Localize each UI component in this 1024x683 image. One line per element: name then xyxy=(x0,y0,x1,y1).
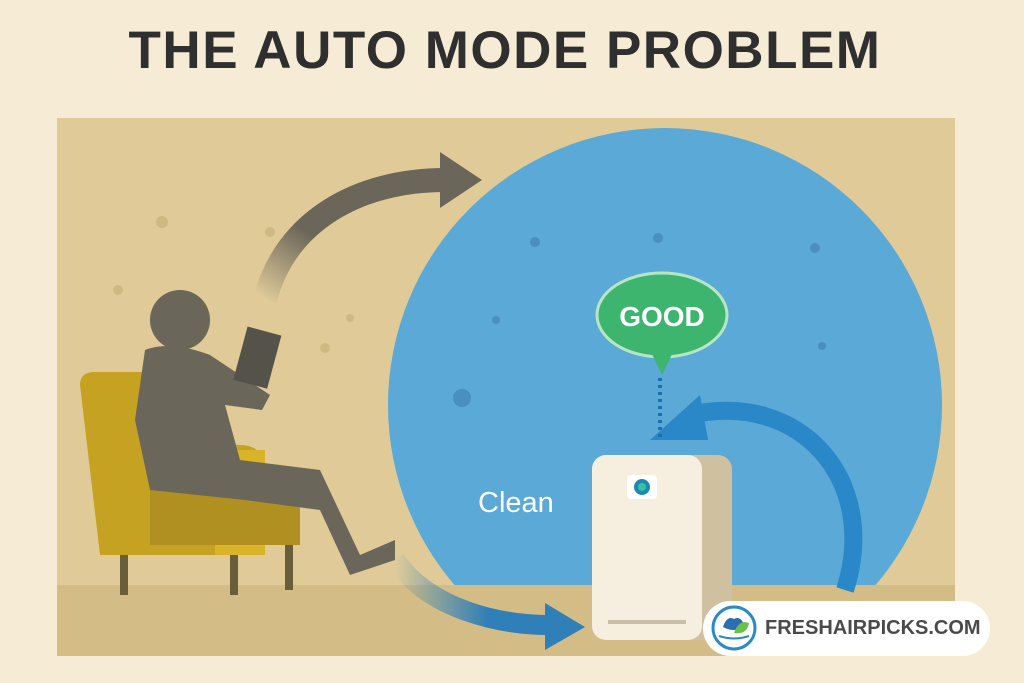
brand text: FRESHAIRPICKS.COM xyxy=(765,617,981,639)
GOOD speech bubble: GOOD xyxy=(619,301,705,332)
armchair xyxy=(80,372,300,595)
arrow: gray up xyxy=(265,152,482,300)
blue air circle xyxy=(388,128,942,585)
purifier xyxy=(592,455,732,640)
brand badge xyxy=(703,601,990,656)
GOOD speech bubble xyxy=(597,273,727,375)
title: THE AUTO MODE PROBLEM xyxy=(129,21,881,80)
dotted indicator xyxy=(658,378,662,440)
logo icon xyxy=(712,606,756,650)
arrow: blue bottom xyxy=(395,560,585,650)
arrow: blue loop xyxy=(650,395,853,590)
illustration panel xyxy=(57,118,955,656)
person xyxy=(135,290,395,575)
label: Clean: Clean xyxy=(478,487,554,519)
